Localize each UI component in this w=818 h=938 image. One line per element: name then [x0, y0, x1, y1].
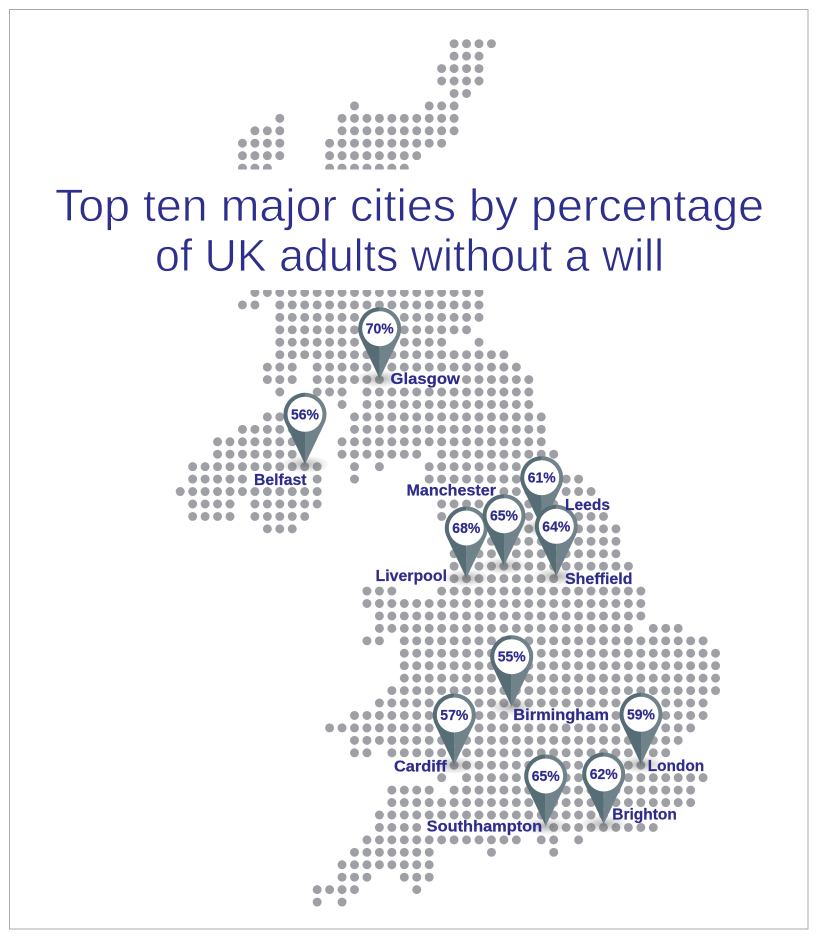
pin: London 59%: 59% [627, 707, 655, 723]
label: Liverpool: Liverpool [376, 568, 447, 585]
pin: Sheffield 64%: 64% [542, 519, 570, 535]
pin: Manchester 65%: 65% [490, 509, 518, 525]
title: Top ten major cities by percentage [55, 180, 764, 231]
label: Manchester: Manchester [406, 483, 496, 500]
pin: Manchester 65% [479, 494, 529, 575]
pin: Cardiff 57% [429, 694, 479, 774]
label: Birmingham: Birmingham [513, 707, 609, 724]
pin: Brighton 62%: 62% [590, 767, 618, 783]
pin: Leeds 61%: 61% [528, 471, 556, 487]
label: Leeds: Leeds [565, 497, 610, 514]
title: of UK adults without a will [155, 230, 664, 281]
label: Cardiff: Cardiff [394, 759, 448, 776]
pin: Glasgow 70%: 70% [366, 322, 394, 338]
pin: Southhampton 65% [521, 754, 571, 835]
label: Southhampton: Southhampton [427, 819, 542, 836]
pin: Southhampton 65%: 65% [532, 769, 560, 785]
pin: Birmingham 55% [487, 635, 537, 716]
label: Brighton: Brighton [612, 806, 677, 823]
pin: Glasgow 70% [355, 307, 405, 388]
pin: Belfast 56%: 56% [291, 407, 319, 423]
label: Belfast: Belfast [254, 472, 306, 489]
dot map of the UK and Ireland [180, 44, 716, 902]
pin: Sheffield 64% [531, 505, 581, 585]
pin: Liverpool 68% [441, 506, 491, 587]
pin: Birmingham 55%: 55% [498, 650, 526, 666]
pin: Liverpool 68%: 68% [452, 521, 480, 537]
label: Glasgow: Glasgow [390, 371, 461, 388]
pin: London 59% [616, 693, 666, 773]
label: Sheffield: Sheffield [565, 571, 632, 588]
pin: Cardiff 57%: 57% [440, 708, 468, 724]
pin: Brighton 62% [579, 752, 629, 833]
label: London: London [648, 758, 704, 775]
title [55, 180, 764, 281]
title band [10, 170, 807, 290]
pin: Leeds 61% [517, 456, 567, 537]
pin: Belfast 56% [280, 393, 330, 473]
